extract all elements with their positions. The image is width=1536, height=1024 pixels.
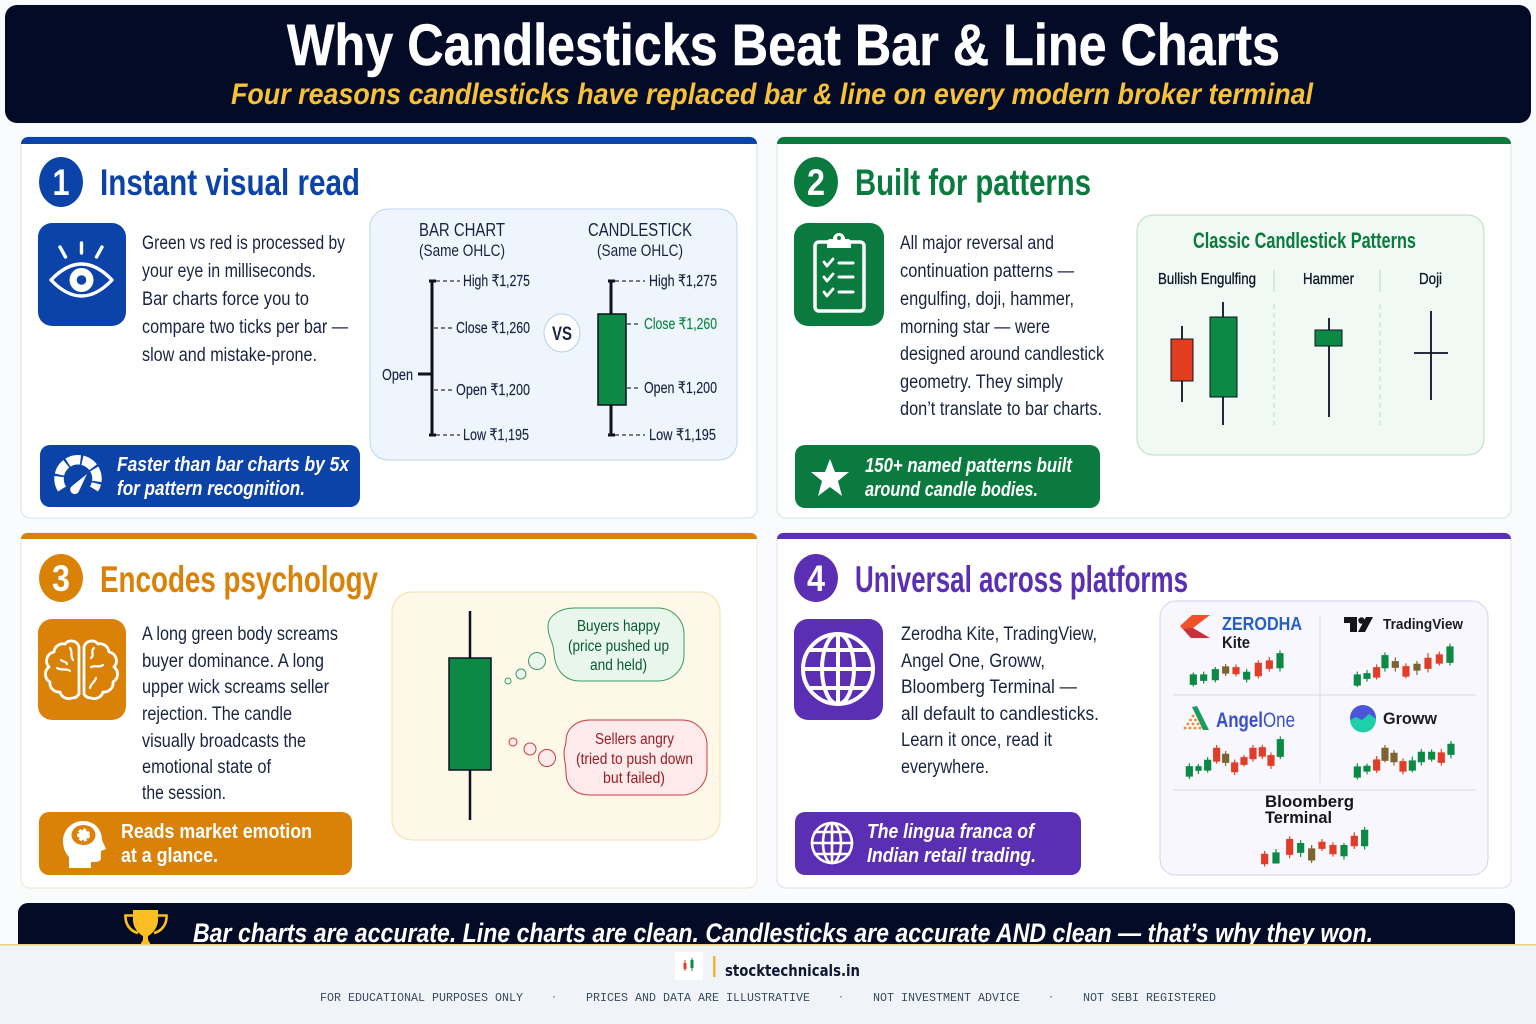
tradingview: TradingView bbox=[1383, 616, 1463, 633]
body text: Learn it once, read it bbox=[901, 730, 1053, 751]
chart: classic candlestick patterns bbox=[1137, 215, 1484, 455]
zerodha kite bbox=[1180, 614, 1302, 687]
callout: faster bbox=[40, 445, 360, 507]
disclaimer: NOT INVESTMENT ADVICE bbox=[873, 991, 1020, 1005]
disclaimer: · bbox=[1049, 989, 1053, 1003]
body text: your eye in milliseconds. bbox=[142, 261, 316, 282]
body text bbox=[900, 233, 1104, 420]
icon: eye bbox=[38, 223, 126, 326]
body text: Zerodha Kite, TradingView, bbox=[901, 624, 1097, 645]
panel: 4 universal across platforms bbox=[777, 533, 1511, 888]
heading: Built for patterns bbox=[855, 162, 1091, 203]
disclaimer: NOT SEBI REGISTERED bbox=[1083, 991, 1216, 1005]
number badge 4 bbox=[794, 554, 838, 602]
thought bubble: sellers: but failed) bbox=[603, 770, 665, 787]
callout: 150+ patterns: 150+ named patterns built bbox=[865, 454, 1073, 477]
disclaimer bbox=[320, 989, 1216, 1005]
doji: Doji bbox=[1419, 271, 1442, 288]
chart: candle psychology bbox=[392, 592, 720, 840]
callout: lingua franca: The lingua franca of bbox=[867, 820, 1036, 843]
groww bbox=[1350, 705, 1454, 780]
body text: Bloomberg Terminal — bbox=[901, 677, 1077, 698]
body text: compare two ticks per bar — bbox=[142, 317, 348, 338]
hammer bbox=[1303, 271, 1355, 417]
thought bubble: sellers: Sellers angry bbox=[595, 731, 674, 748]
zerodha kite: ZERODHA bbox=[1222, 614, 1302, 634]
number badge 3 bbox=[39, 554, 83, 602]
icon: star bbox=[811, 459, 849, 496]
body text: geometry. They simply bbox=[900, 372, 1063, 393]
body text: everywhere. bbox=[901, 757, 989, 778]
callout: market emotion: Reads market emotion bbox=[121, 820, 312, 843]
candlestick OHLC bbox=[598, 273, 717, 444]
bloomberg terminal bbox=[1262, 792, 1368, 867]
body text: A long green body screams bbox=[142, 624, 338, 645]
icon: brain bbox=[38, 619, 126, 720]
number badge 4: 4 bbox=[807, 558, 825, 599]
body text bbox=[901, 624, 1099, 778]
callout: 150+ patterns: around candle bodies. bbox=[865, 478, 1038, 501]
bar chart OHLC bbox=[382, 273, 530, 444]
bullish engulfing: Bullish Engulfing bbox=[1158, 271, 1256, 288]
number badge 3: 3 bbox=[52, 558, 70, 599]
vs badge: VS bbox=[552, 324, 572, 345]
icon: head with brain bbox=[63, 821, 106, 868]
vs badge bbox=[544, 314, 580, 352]
disclaimer: FOR EDUCATIONAL PURPOSES ONLY bbox=[320, 991, 523, 1005]
panel: 1 instant visual read bbox=[21, 137, 757, 518]
platforms grid bbox=[1160, 601, 1488, 875]
brand logo: stocktechnicals.in bbox=[725, 961, 860, 980]
number badge 1 bbox=[39, 157, 83, 207]
body text: the session. bbox=[142, 783, 226, 804]
footer bbox=[0, 944, 1536, 1024]
header banner bbox=[5, 5, 1531, 123]
thought bubble: buyers: (price pushed up bbox=[568, 638, 669, 655]
callout: market emotion bbox=[39, 812, 352, 875]
body text: upper wick screams seller bbox=[142, 677, 330, 698]
bar chart OHLC: Close ₹1,260 bbox=[456, 320, 530, 337]
disclaimer: · bbox=[839, 989, 843, 1003]
large candle bbox=[449, 611, 491, 820]
angel one: AngelOne bbox=[1216, 709, 1295, 732]
number badge 2 bbox=[794, 157, 838, 207]
number badge 2: 2 bbox=[807, 162, 825, 203]
bullish engulfing bbox=[1158, 271, 1256, 425]
thought bubble: sellers: (tried to push down bbox=[576, 751, 693, 768]
bar chart OHLC: Low ₹1,195 bbox=[463, 427, 529, 444]
body text: rejection. The candle bbox=[142, 704, 292, 725]
takeaway text: Bar charts are accurate. Line charts are clean. Candlesticks are accurate AND clean — that’s why they won. bbox=[193, 918, 1373, 948]
callout: lingua franca bbox=[795, 812, 1081, 875]
disclaimer: · bbox=[552, 989, 556, 1003]
heading: Encodes psychology bbox=[100, 559, 378, 600]
panel: 2 built for patterns bbox=[777, 137, 1511, 518]
bloomberg terminal: Bloomberg bbox=[1265, 792, 1354, 811]
bloomberg terminal: Terminal bbox=[1265, 808, 1332, 827]
icon: clipboard checklist bbox=[794, 223, 884, 326]
doji bbox=[1414, 271, 1448, 400]
title: Why Candlesticks Beat Bar & Line Charts bbox=[287, 13, 1280, 78]
bar chart OHLC: High ₹1,275 bbox=[463, 273, 530, 290]
bar chart heading: (Same OHLC) bbox=[419, 241, 505, 260]
body text: continuation patterns — bbox=[900, 261, 1074, 282]
heading: Universal across platforms bbox=[855, 559, 1188, 600]
thought bubble: buyers: and held) bbox=[590, 657, 647, 674]
candlestick OHLC: High ₹1,275 bbox=[649, 273, 717, 290]
subtitle: Four reasons candlesticks have replaced bar & line on every modern broker terminal bbox=[231, 78, 1314, 111]
bar chart heading bbox=[419, 220, 505, 260]
zerodha kite: Kite bbox=[1222, 633, 1250, 652]
thought bubble: buyers: Buyers happy bbox=[577, 618, 660, 635]
body text: Angel One, Groww, bbox=[901, 651, 1045, 672]
bar chart OHLC: Open ₹1,200 bbox=[456, 382, 530, 399]
body text: buyer dominance. A long bbox=[142, 651, 324, 672]
chart: bar vs candlestick bbox=[370, 209, 737, 460]
body text bbox=[142, 624, 338, 804]
heading: Instant visual read bbox=[100, 162, 360, 203]
callout: market emotion: at a glance. bbox=[121, 844, 218, 867]
angel one bbox=[1184, 706, 1295, 779]
body text: Bar charts force you to bbox=[142, 289, 309, 310]
body text: don’t translate to bar charts. bbox=[900, 399, 1102, 420]
brand logo bbox=[675, 952, 860, 980]
tradingview bbox=[1344, 616, 1463, 687]
body text: slow and mistake-prone. bbox=[142, 345, 317, 366]
number badge 1: 1 bbox=[52, 162, 70, 203]
callout: lingua franca: Indian retail trading. bbox=[867, 844, 1036, 867]
candlestick heading: (Same OHLC) bbox=[597, 241, 683, 260]
body text: emotional state of bbox=[142, 757, 272, 778]
body text: all default to candlesticks. bbox=[901, 704, 1099, 725]
body text: designed around candlestick bbox=[900, 344, 1104, 365]
body text: engulfing, doji, hammer, bbox=[900, 289, 1074, 310]
body text: visually broadcasts the bbox=[142, 731, 306, 752]
panel: 3 encodes psychology bbox=[21, 533, 757, 888]
icon: trophy bbox=[125, 910, 167, 945]
candlestick OHLC: Open ₹1,200 bbox=[644, 380, 717, 397]
icon: globe bbox=[794, 619, 883, 720]
thought bubble: buyers bbox=[505, 608, 684, 684]
disclaimer: PRICES AND DATA ARE ILLUSTRATIVE bbox=[586, 991, 810, 1005]
bottom takeaway banner bbox=[18, 903, 1515, 963]
icon: speedometer bbox=[59, 460, 97, 494]
chart title: Classic Candlestick Patterns bbox=[1193, 228, 1416, 253]
icon: small globe bbox=[812, 823, 852, 863]
callout: 150+ patterns bbox=[795, 445, 1100, 508]
bar chart heading: BAR CHART bbox=[419, 220, 505, 240]
hammer: Hammer bbox=[1303, 271, 1355, 288]
callout: faster: for pattern recognition. bbox=[117, 477, 305, 500]
candlestick OHLC: Low ₹1,195 bbox=[649, 427, 716, 444]
body text: morning star — were bbox=[900, 317, 1050, 338]
candlestick OHLC: Close ₹1,260 bbox=[644, 316, 717, 333]
bar chart OHLC: Open bbox=[382, 367, 413, 384]
body text: All major reversal and bbox=[900, 233, 1054, 254]
candlestick heading bbox=[588, 220, 692, 260]
body text: Green vs red is processed by bbox=[142, 233, 345, 254]
candlestick heading: CANDLESTICK bbox=[588, 220, 692, 240]
groww: Groww bbox=[1383, 709, 1438, 728]
thought bubble: sellers bbox=[509, 720, 707, 795]
callout: faster: Faster than bar charts by 5x bbox=[117, 453, 350, 476]
body text bbox=[142, 233, 348, 366]
